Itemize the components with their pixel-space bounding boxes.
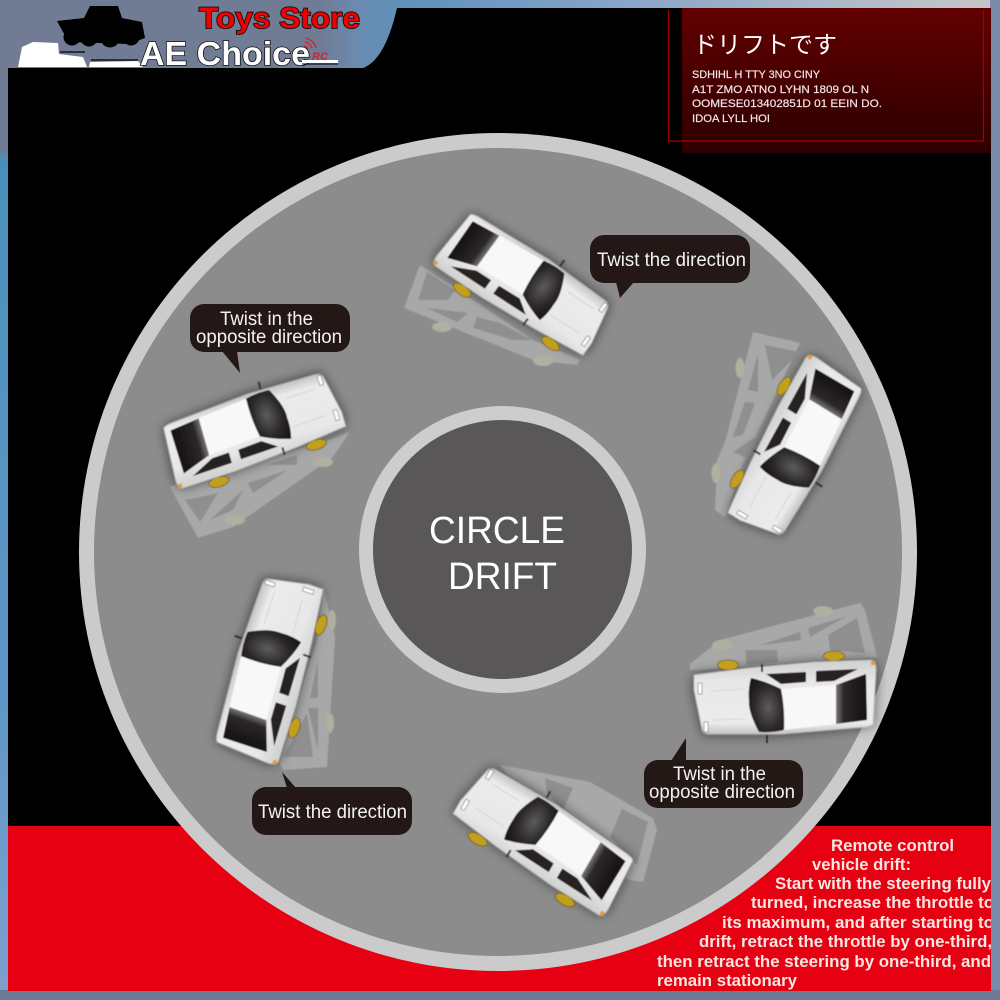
info box: drift description	[668, 8, 991, 153]
instructions text: drift, retract the throttle by one-third,	[699, 933, 992, 951]
callout: twist the direction, top	[590, 235, 750, 298]
center circle: circle drift	[359, 406, 646, 693]
info box: drift description: A1T ZMO ATNO LYHN 1809 OL N	[692, 84, 869, 96]
callout: twist the direction, lower left: Twist the direction	[258, 802, 407, 823]
callout: twist the direction, lower left	[252, 772, 412, 835]
instructions text: Remote control	[831, 837, 954, 855]
instructions text: Start with the steering fully	[775, 875, 992, 893]
callout: twist the direction, top: Twist the direction	[597, 250, 746, 271]
icon: truck silhouette	[57, 6, 145, 48]
car: lower right	[690, 603, 877, 743]
logo: AE Choice RC Toys Store: AE Choice	[140, 35, 310, 72]
info box: drift description: ドリフトです	[693, 25, 837, 60]
callout: twist in the opposite direction, left: opposite direction	[196, 327, 342, 348]
icon: radio signal	[304, 38, 316, 49]
instructions text: vehicle drift:	[812, 856, 911, 874]
instructions text	[657, 837, 994, 990]
info box: drift description: OOMESE013402851D 01 EEIN DO.	[692, 98, 882, 110]
callout: twist in the opposite direction, lower right: Twist in the	[673, 764, 766, 785]
logo: AE Choice RC Toys Store: RC	[312, 51, 329, 63]
callout: twist in the opposite direction, left: Twist in the	[220, 309, 313, 330]
car: left	[155, 362, 353, 538]
center circle: circle drift: DRIFT	[448, 556, 557, 598]
logo: AE Choice RC Toys Store: Toys Store	[199, 2, 360, 35]
car: bottom	[440, 754, 657, 926]
callout: twist in the opposite direction, lower right	[644, 738, 803, 808]
callout: twist in the opposite direction, left	[190, 304, 350, 373]
logo: AE Choice RC Toys Store	[18, 2, 360, 72]
car: lower left	[198, 566, 346, 770]
car: right	[707, 332, 879, 548]
callout: twist in the opposite direction, lower right: opposite direction	[649, 782, 795, 803]
instructions text: then retract the steering by one-third, and	[657, 953, 991, 971]
info box: drift description: IDOA LYLL HOI	[692, 113, 770, 125]
instructions text: turned, increase the throttle to	[751, 894, 994, 912]
car: top	[404, 197, 622, 375]
drift track circle	[79, 133, 917, 971]
instructions text: remain stationary	[657, 972, 798, 990]
info box: drift description: SDHIHL H TTY 3NO CINY	[692, 69, 821, 81]
red instruction panel background	[8, 826, 991, 991]
instructions text: its maximum, and after starting to	[722, 914, 994, 932]
center circle: circle drift: CIRCLE	[429, 510, 565, 552]
